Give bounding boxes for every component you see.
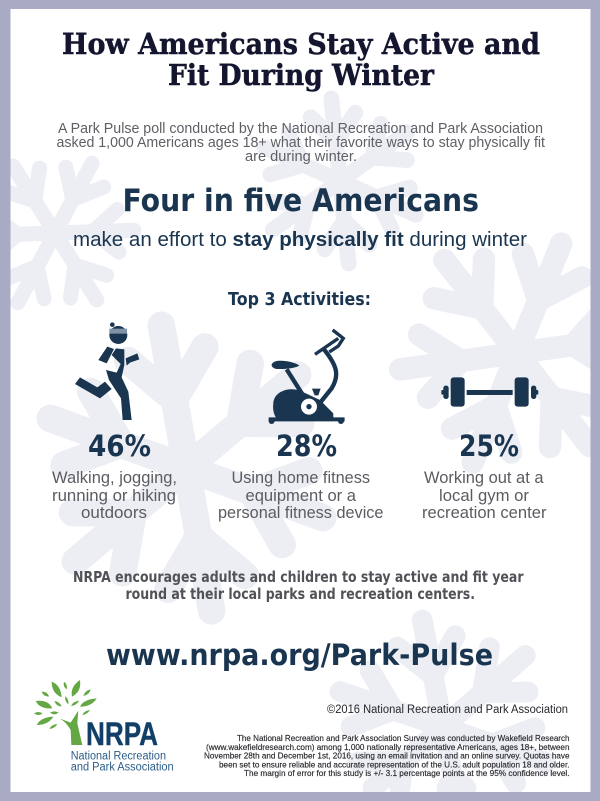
methodology note: The National Recreation and Park Association Survey was conducted by Wakefield Research — [237, 733, 570, 743]
label: gym: recreation center — [422, 504, 547, 522]
label: home fitness: equipment or a — [246, 487, 357, 505]
encouragement text: round at their local parks and recreation centers. — [126, 585, 475, 603]
subheadline: make an effort to stay physically fit during winter — [73, 229, 527, 251]
headline: four in five: Four in five Americans — [122, 183, 479, 219]
label: gym: local gym or — [439, 487, 530, 505]
stat: 46%: 46% — [88, 429, 151, 463]
label: home fitness: personal fitness device — [218, 504, 384, 522]
intro paragraph: A Park Pulse poll conducted by the National Recreation and Park Association — [58, 121, 543, 137]
encouragement text — [73, 568, 524, 603]
label: walking: Walking, jogging, — [52, 469, 177, 487]
methodology note: The margin of error for this study is +/- 3.1 percentage points at the 95% confidence level. — [244, 768, 570, 778]
icon: dumbbell — [441, 377, 538, 407]
methodology note: (www.wakefieldresearch.com) among 1,000 nationally representative Americans, ages 18+, between — [206, 742, 570, 752]
intro paragraph — [56, 121, 545, 165]
top 3 heading: Top 3 Activities: — [228, 289, 371, 310]
title — [62, 27, 540, 92]
icon: runner — [75, 322, 139, 420]
stat: 28%: 28% — [276, 429, 337, 463]
stat: 25%: 25% — [459, 429, 519, 463]
methodology note: been set to ensure reliable and accurate representation of the U.S. adult population 18 and older. — [219, 760, 570, 770]
title: Fit During Winter — [168, 58, 435, 92]
intro paragraph: asked 1,000 Americans ages 18+ what their favorite ways to stay physically fit — [56, 135, 545, 151]
encouragement text: NRPA encourages adults and children to stay active and fit year — [73, 568, 524, 586]
logo tagline: and Park Association — [71, 762, 174, 774]
url: www.nrpa.org/Park-Pulse — [106, 638, 493, 672]
methodology note — [204, 733, 570, 778]
methodology note: November 28th and December 1st, 2016, using an email invitation and an online survey. Quotas have — [204, 750, 570, 760]
intro paragraph: are during winter. — [245, 149, 357, 165]
logo: NRPA — [34, 680, 174, 774]
logo tree — [34, 680, 97, 745]
label: walking: outdoors — [81, 504, 147, 522]
label: home fitness: Using home fitness — [232, 469, 370, 487]
label: home fitness — [218, 469, 384, 522]
title: How Americans Stay Active and — [62, 27, 540, 61]
copyright: ©2016 National Recreation and Park Association — [327, 704, 568, 716]
label: walking — [52, 469, 177, 522]
icon: exercise bike — [269, 330, 345, 424]
label: gym — [422, 469, 547, 522]
label: gym: Working out at a — [424, 469, 544, 487]
label: walking: running or hiking — [52, 487, 176, 505]
logo tagline: National Recreation — [71, 750, 166, 762]
logo tagline — [71, 750, 174, 774]
logo wordmark: NRPA — [86, 716, 158, 752]
